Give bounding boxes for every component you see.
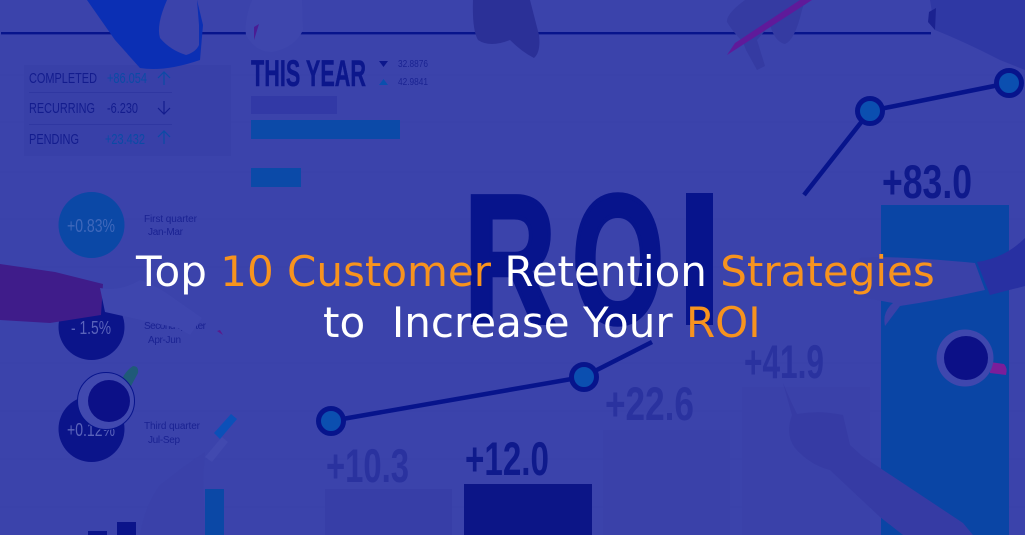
panel: this year xyxy=(251,53,428,187)
bar: +83.0 xyxy=(881,205,1009,535)
hand: top right with pencil xyxy=(727,0,812,70)
bar: third xyxy=(251,168,301,187)
value: second quarter: - 1.5% xyxy=(71,318,111,338)
big ROI letters: R xyxy=(464,156,556,362)
hand: top centre xyxy=(473,0,539,58)
value: third quarter: +0.12% xyxy=(67,420,115,440)
hand: right with plaid sleeve xyxy=(850,238,1025,326)
legend value: 32.8876 xyxy=(398,59,428,70)
hand: bottom left pointing xyxy=(140,452,205,535)
bar: +12.0 xyxy=(464,484,592,535)
caption: first quarter: First quarter xyxy=(144,214,198,225)
arm: bottom right pointing xyxy=(783,383,973,535)
hand: left with red sleeve xyxy=(0,264,223,335)
bar: first xyxy=(251,96,337,114)
coffee cup: left xyxy=(78,366,138,430)
bar chart: right xyxy=(325,155,1009,535)
bar: striped xyxy=(251,120,400,139)
label: completed: COMPLETED xyxy=(29,71,97,87)
panel: status table xyxy=(24,65,231,156)
value: first quarter: +0.83% xyxy=(67,216,115,236)
caption: second quarter: Second quarter xyxy=(144,321,207,332)
value: +10.3: +10.3 xyxy=(326,439,409,492)
value: completed: +86.054 xyxy=(107,71,147,87)
quarter: third xyxy=(58,396,201,462)
quarter: first xyxy=(58,192,198,258)
line chart: lower xyxy=(318,342,652,434)
caption: second quarter months: Apr-Jun xyxy=(148,335,181,346)
arrow up xyxy=(158,131,170,144)
value: +83.0: +83.0 xyxy=(882,155,972,208)
line chart: upper xyxy=(804,70,1022,195)
value: pending: +23.432 xyxy=(105,132,145,148)
title xyxy=(135,247,935,347)
circle: second quarter xyxy=(58,294,124,360)
legend value: 42.9841 xyxy=(398,77,428,88)
value: +41.9: +41.9 xyxy=(744,335,824,388)
circle: third quarter xyxy=(58,396,124,462)
arrow down xyxy=(158,101,170,114)
top horizontal rule xyxy=(1,32,931,34)
bar: +22.6 xyxy=(603,430,730,535)
big ROI letters: O xyxy=(572,156,664,362)
coffee cup: right xyxy=(936,330,1007,386)
caption: third quarter: Third quarter xyxy=(144,421,201,432)
legend: down marker xyxy=(379,61,388,67)
circle: first quarter xyxy=(58,192,124,258)
big ROI letters xyxy=(464,156,710,362)
legend: up marker xyxy=(379,79,388,85)
value: recurring: -6.230 xyxy=(107,101,138,117)
bar chart: bottom left xyxy=(88,489,224,535)
bar: +10.3 xyxy=(325,489,452,535)
value: +22.6: +22.6 xyxy=(605,377,694,430)
arrow up xyxy=(158,72,170,85)
marker pen xyxy=(205,414,237,462)
caption: first quarter months: Jan-Mar xyxy=(148,227,184,238)
bar: +41.9 xyxy=(742,387,870,535)
label: recurring: RECURRING xyxy=(29,101,95,117)
sleeve: top right sweater xyxy=(928,0,1025,70)
label: pending: PENDING xyxy=(29,132,79,148)
title line one: Top 10 Customer Retention Strategies xyxy=(135,247,935,296)
caption: third quarter months: Jul-Sep xyxy=(148,435,180,446)
hand: top left with blue sleeve xyxy=(87,0,203,69)
heading: this year: THIS YEAR xyxy=(251,53,366,94)
value: +12.0: +12.0 xyxy=(465,432,549,485)
hand: top centre left xyxy=(246,0,303,52)
quarter: second xyxy=(58,294,207,360)
title line two: to Increase Your ROI xyxy=(323,298,761,347)
